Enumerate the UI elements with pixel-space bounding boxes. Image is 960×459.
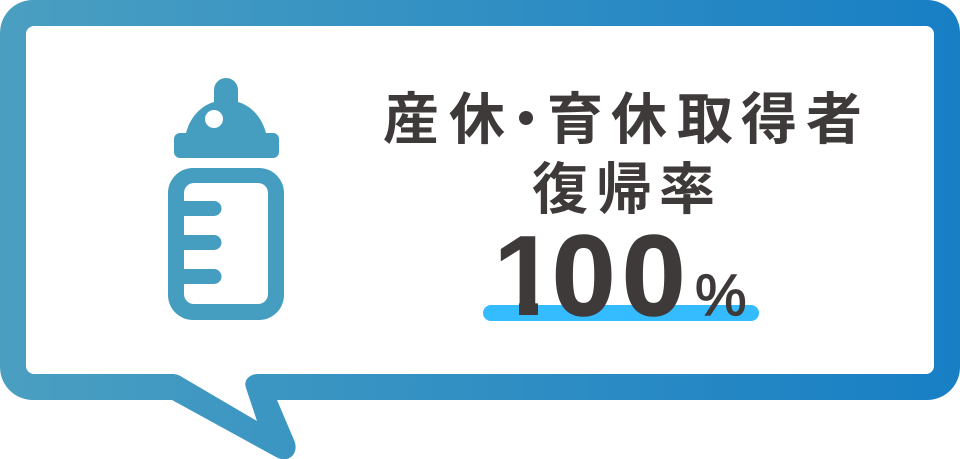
heading line 1: 産休: [383, 88, 505, 151]
icon: baby bottle: [168, 78, 284, 320]
highlight underline: [483, 305, 759, 321]
heading line 2: 復帰率: [532, 158, 715, 221]
value: 100: 00: [552, 213, 685, 340]
value: 100: 1: [493, 213, 556, 340]
heading line 1 continued: 育休取得者: [547, 88, 862, 151]
heading dot: [519, 111, 533, 125]
value: percent sign: %: [695, 263, 747, 328]
value: 100: [500, 234, 682, 317]
